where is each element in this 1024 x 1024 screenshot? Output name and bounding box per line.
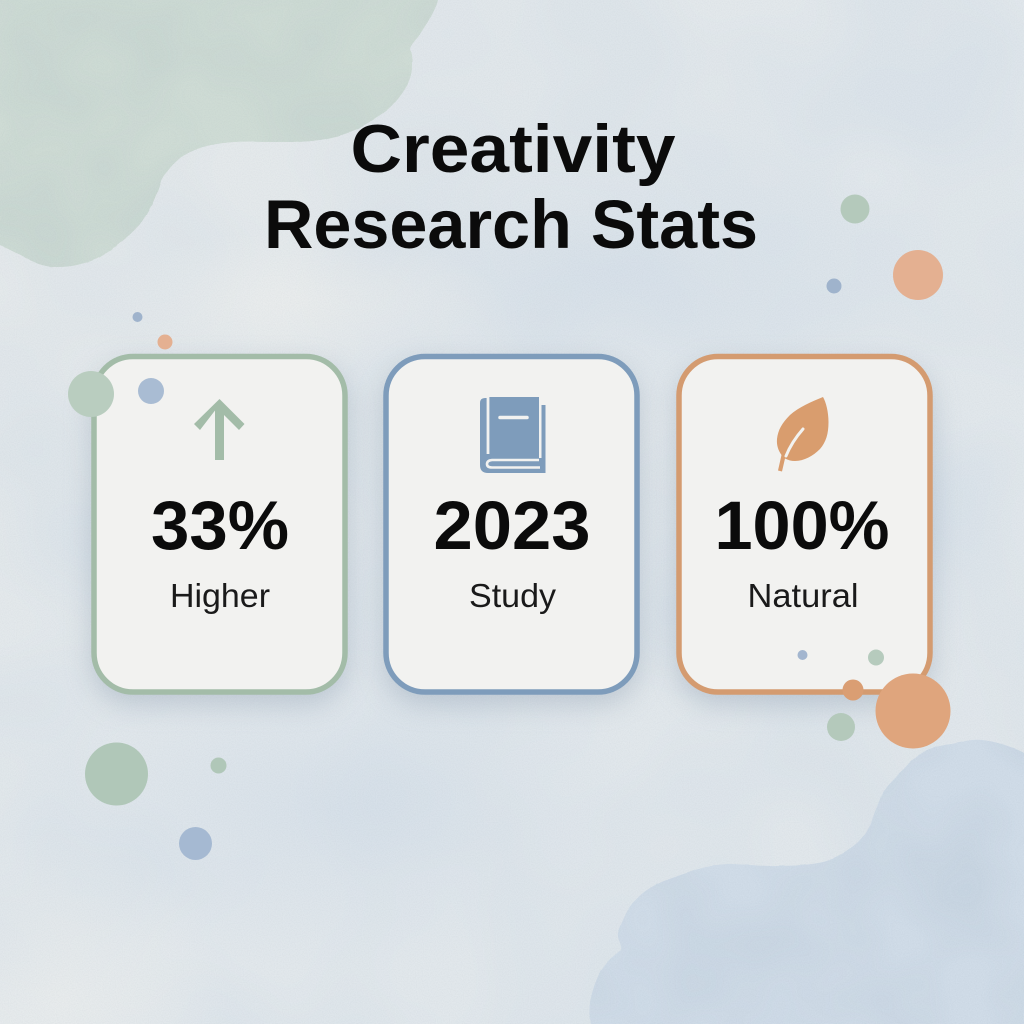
watercolor blob: blue bottom right [590,740,1024,1024]
label: Study: Study [469,577,557,614]
decorative dots [68,194,950,860]
icon: leaf [777,397,828,472]
label: Natural: Natural [748,577,858,614]
title [264,111,758,263]
panel: 100% Natural [679,356,930,692]
title: Creativity [350,111,676,187]
icon: book [480,397,546,473]
stat: 33%: 33% [151,487,289,564]
title: Research Stats [264,186,758,263]
watercolor blob: green top left [0,0,438,267]
panel: 2023 Study [386,356,637,692]
label: Higher: Higher [170,577,270,614]
stat: 2023: 2023 [434,487,590,564]
stat: 100%: 100% [714,487,890,564]
icon: up arrow [194,399,244,460]
panel: 33% Higher [94,356,345,692]
